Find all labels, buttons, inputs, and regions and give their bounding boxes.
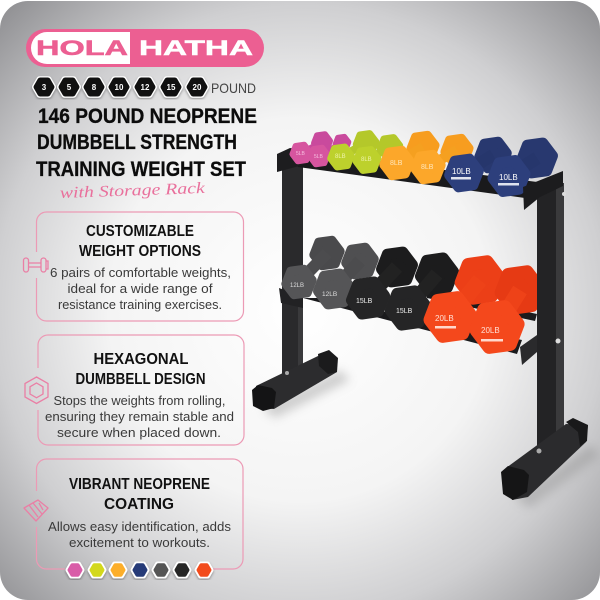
- panel body text: ensuring they remain stable and: [45, 409, 234, 424]
- panel heading: COATING: [104, 496, 174, 513]
- orange dumbbells: [382, 134, 471, 180]
- lime dumbbells: [330, 133, 401, 171]
- weight hexagon badges: [35, 79, 206, 95]
- brand logo pill: HATHA: [139, 37, 253, 60]
- weight hexagon badges: 15: [167, 83, 176, 92]
- panel body text: secure when placed down.: [57, 425, 221, 440]
- lime dumbbells: 8LB: [335, 154, 346, 160]
- icon: dumbbell: [24, 258, 48, 272]
- title: DUMBBELL STRENGTH: [37, 131, 237, 154]
- panel body text: 6 pairs of comfortable weights,: [50, 265, 231, 280]
- brand logo pill: [26, 29, 264, 67]
- panel heading: VIBRANT NEOPRENE: [69, 476, 210, 493]
- panel heading: [79, 223, 201, 260]
- panel heading: [76, 351, 206, 388]
- black dumbbells: [350, 251, 455, 326]
- weight hexagon badges: 8: [92, 83, 97, 92]
- lime dumbbells: 8LB: [361, 157, 372, 163]
- grey dumbbells: 12LB: [322, 291, 337, 298]
- panel heading: CUSTOMIZABLE: [86, 223, 194, 240]
- title: TRAINING WEIGHT SET: [36, 158, 246, 181]
- floor shadows: [262, 370, 600, 508]
- weight hexagon badges: 3: [42, 83, 47, 92]
- pink dumbbells: 5LB: [296, 151, 306, 157]
- navy dumbbells: 10LB: [499, 173, 518, 182]
- title: [36, 105, 257, 181]
- weight hexagon badges: 12: [141, 83, 150, 92]
- panel body text: Allows easy identification, adds: [48, 519, 232, 534]
- orange dumbbells: 8LB: [421, 164, 434, 171]
- panel heading: DUMBBELL DESIGN: [76, 371, 206, 388]
- black dumbbells: 15LB: [356, 298, 373, 305]
- red dumbbells: 20LB: [435, 314, 454, 323]
- script subtitle: with Storage Rack: [60, 180, 206, 202]
- orange dumbbells: 8LB: [390, 160, 403, 167]
- icon: colour swatch fan: [24, 500, 48, 521]
- panel body text: excitement to workouts.: [69, 535, 210, 550]
- navy dumbbells: [448, 141, 554, 192]
- storage rack: left frame: [252, 165, 338, 411]
- black dumbbells: 15LB: [396, 308, 413, 315]
- dumbbells: top row: [291, 133, 554, 192]
- colour swatches: [68, 564, 211, 576]
- red dumbbells: 20LB: [481, 326, 500, 335]
- grey dumbbells: [284, 240, 376, 305]
- pink dumbbells: [291, 134, 350, 165]
- panel: customizable weight options: [36, 212, 244, 321]
- panel: vibrant neoprene coating: [36, 459, 243, 569]
- dumbbells: lower row: [284, 240, 541, 348]
- panel heading: HEXAGONAL: [94, 351, 188, 368]
- right foot: [506, 424, 588, 500]
- pink dumbbells: 5LB: [314, 154, 324, 160]
- red dumbbells: [428, 261, 541, 348]
- panel body text: resistance training exercises.: [58, 297, 222, 312]
- panel body text: ideal for a wide range of: [68, 281, 213, 296]
- panel body text: [45, 393, 234, 440]
- left foot: [256, 356, 337, 409]
- lower shelf: [279, 288, 537, 354]
- panel heading: WEIGHT OPTIONS: [79, 243, 201, 260]
- panel body text: Stops the weights from rolling,: [54, 393, 226, 408]
- panel heading: [69, 476, 210, 513]
- panel body text: [50, 265, 231, 312]
- top shelf: [277, 148, 545, 198]
- brand logo pill: HOLA: [36, 37, 128, 60]
- pound label: POUND: [211, 80, 256, 96]
- weight hexagon badges: 5: [67, 83, 72, 92]
- icon: hexagon: [25, 377, 48, 404]
- navy dumbbells: 10LB: [452, 167, 471, 176]
- storage rack: right frame: [501, 171, 588, 500]
- title: 146 POUND NEOPRENE: [38, 105, 257, 128]
- grey dumbbells: 12LB: [290, 283, 304, 289]
- panel: hexagonal dumbbell design: [38, 335, 244, 445]
- weight hexagon badges: 20: [193, 83, 202, 92]
- weight hexagon badges: 10: [115, 83, 124, 92]
- panel body text: [48, 519, 232, 550]
